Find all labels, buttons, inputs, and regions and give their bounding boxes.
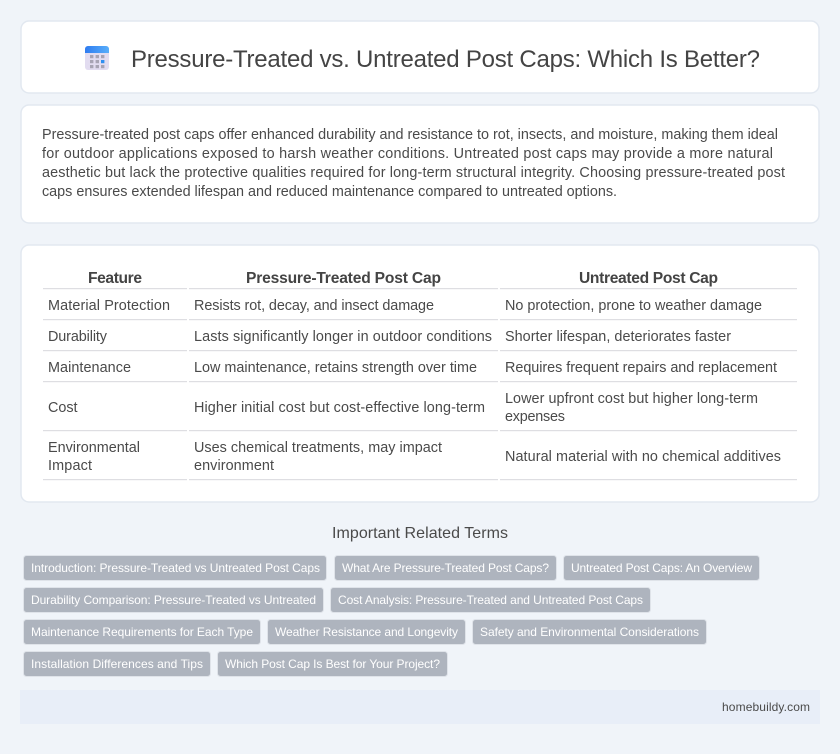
row: maintenance: Maintenance bbox=[48, 360, 131, 376]
tag bbox=[564, 556, 760, 580]
tag bbox=[24, 556, 326, 580]
row: durability: Durability bbox=[48, 329, 108, 345]
panel: introduction text: Pressure-treated post caps offer enhanced durability and resistance to rot, insects, and moisture, making them ideal bbox=[42, 127, 778, 143]
row: maintenance: Low maintenance, retains strength over time bbox=[194, 360, 477, 376]
tag: Weather Resistance and Longevity bbox=[275, 625, 458, 639]
row: material protection: Resists rot, decay, and insect damage bbox=[194, 298, 434, 314]
tag: Introduction: Pressure-Treated vs Untreated Post Caps bbox=[31, 561, 320, 575]
tag: Maintenance Requirements for Each Type bbox=[31, 625, 253, 639]
tag bbox=[24, 620, 260, 644]
row: environmental impact: Environmental bbox=[48, 440, 140, 456]
row: cost: Lower upfront cost but higher long-term bbox=[505, 391, 758, 407]
row: cost: Cost bbox=[48, 400, 78, 416]
row: durability: Shorter lifespan, deteriorates faster bbox=[505, 329, 731, 345]
tag: Which Post Cap Is Best for Your Project? bbox=[225, 657, 440, 671]
panel: introduction text: aesthetic but lack the protective qualities required for long-term structural integrity. Choosing pressure-treated post bbox=[42, 165, 785, 181]
footer bbox=[20, 690, 820, 724]
panel: introduction text: caps ensures extended lifespan and reduced maintenance compared to untreated options. bbox=[42, 184, 617, 200]
panel: introduction text: for outdoor applications exposed to harsh weather conditions. Untreated post caps may provide a more natural bbox=[42, 146, 773, 162]
row: cost: Higher initial cost but cost-effective long-term bbox=[194, 400, 485, 416]
panel: introduction text bbox=[21, 105, 819, 223]
row: material protection: No protection, prone to weather damage bbox=[505, 298, 762, 314]
row: cost bbox=[48, 391, 758, 425]
row: material protection: Material Protection bbox=[48, 298, 170, 314]
row: environmental impact: Natural material with no chemical additives bbox=[505, 449, 781, 465]
row: durability bbox=[48, 329, 731, 345]
table header: Feature bbox=[88, 270, 142, 287]
title: Pressure-Treated vs. Untreated Post Caps: Which Is Better? bbox=[131, 46, 760, 73]
tag: Safety and Environmental Considerations bbox=[480, 625, 699, 639]
panel: comparison table bbox=[21, 245, 819, 502]
row: environmental impact: Uses chemical treatments, may impact bbox=[194, 440, 442, 456]
heading: related terms: Important Related Terms bbox=[332, 525, 508, 542]
table header bbox=[88, 270, 718, 287]
tag bbox=[24, 652, 210, 676]
row: durability: Lasts significantly longer in outdoor conditions bbox=[194, 329, 492, 345]
row: maintenance bbox=[48, 360, 777, 376]
table header: Pressure-Treated Post Cap bbox=[246, 270, 441, 287]
related term tags bbox=[24, 556, 760, 676]
panel: header bbox=[21, 21, 819, 93]
footer: homebuildy.com bbox=[722, 700, 810, 714]
tag: Installation Differences and Tips bbox=[31, 657, 203, 671]
tag bbox=[472, 620, 706, 644]
row: environmental impact: Impact bbox=[48, 458, 92, 474]
table header: Untreated Post Cap bbox=[579, 270, 718, 287]
tag bbox=[24, 588, 324, 612]
row: maintenance: Requires frequent repairs and replacement bbox=[505, 360, 777, 376]
tag bbox=[218, 652, 448, 676]
tag: Cost Analysis: Pressure-Treated and Untreated Post Caps bbox=[338, 593, 643, 607]
row: material protection bbox=[48, 298, 762, 314]
row: environmental impact: environment bbox=[194, 458, 274, 474]
row: cost: expenses bbox=[505, 409, 565, 425]
tag bbox=[330, 588, 650, 612]
tag: Untreated Post Caps: An Overview bbox=[571, 561, 752, 575]
tag: Durability Comparison: Pressure-Treated vs Untreated bbox=[31, 593, 316, 607]
icon: calendar bbox=[85, 46, 109, 70]
tag: What Are Pressure-Treated Post Caps? bbox=[342, 561, 549, 575]
tag bbox=[268, 620, 466, 644]
row: environmental impact bbox=[48, 440, 781, 474]
tag bbox=[334, 556, 556, 580]
